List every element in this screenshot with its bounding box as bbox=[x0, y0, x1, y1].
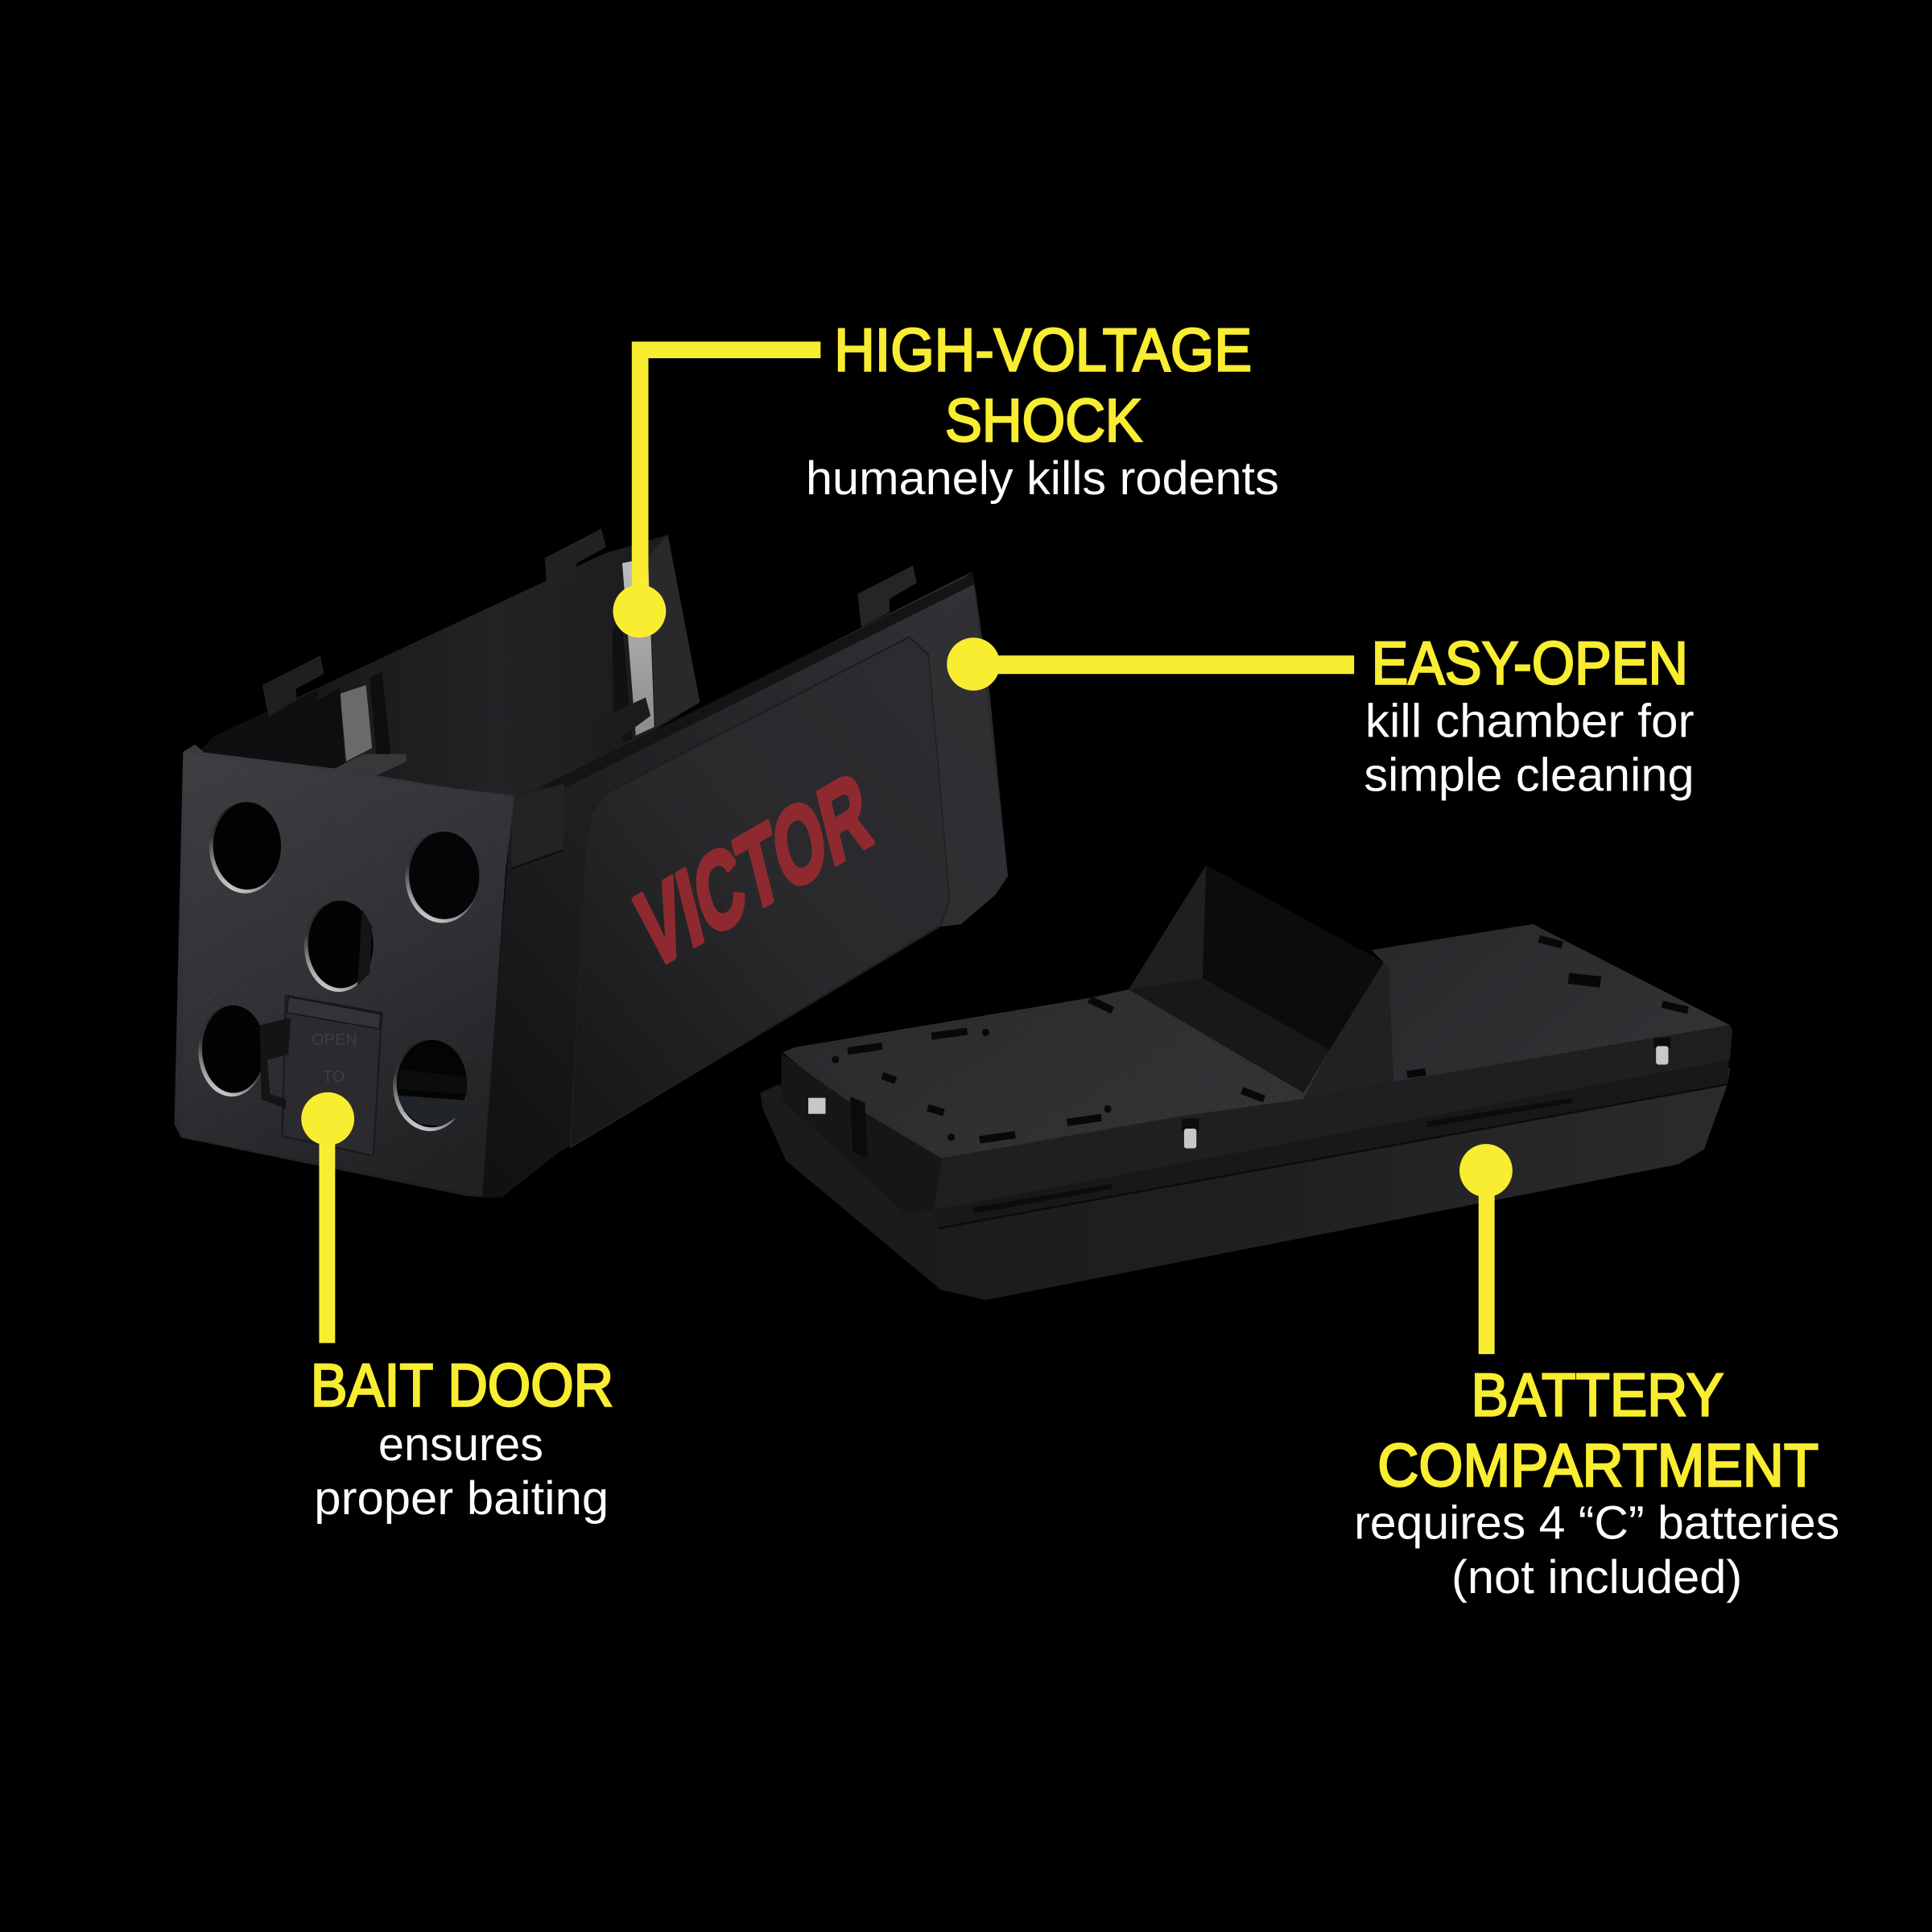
metal pin three bbox=[808, 1098, 826, 1114]
side right strip bbox=[929, 584, 1008, 927]
rim seam bbox=[934, 1047, 1730, 1228]
embossed side panel bbox=[571, 637, 950, 1147]
hopper right wing bbox=[1303, 962, 1393, 1099]
callout: bait door bbox=[301, 1092, 613, 1525]
small top flange bbox=[332, 754, 407, 778]
marker dot bbox=[613, 584, 666, 638]
metal pin two bbox=[1656, 1046, 1668, 1064]
near silver shock plate bbox=[340, 685, 372, 762]
hole lower-left bbox=[198, 1005, 265, 1096]
side upper rim bbox=[542, 572, 975, 796]
product: battery compartment base bbox=[760, 865, 1732, 1300]
leader line bbox=[973, 655, 1354, 674]
description: kill chamber for bbox=[1365, 695, 1695, 747]
interior rear rib bbox=[648, 535, 700, 727]
description: proper baiting bbox=[314, 1472, 609, 1525]
hole center bbox=[304, 901, 374, 992]
heading: BATTERY bbox=[1472, 1361, 1724, 1429]
left interior shadow bbox=[197, 690, 323, 778]
front face texture bbox=[183, 753, 513, 1195]
seam slots bbox=[973, 1098, 1572, 1214]
top surface texture bbox=[795, 989, 1303, 1158]
heading bbox=[1377, 1361, 1818, 1499]
left hinge block bbox=[511, 783, 564, 869]
heading: EASY-OPEN bbox=[1372, 629, 1688, 696]
description bbox=[314, 1418, 609, 1525]
callout: battery compartment bbox=[1354, 1144, 1839, 1604]
right top surface bbox=[1372, 924, 1730, 1082]
hopper back wall bbox=[1203, 865, 1384, 1050]
bait door: TO bbox=[323, 1068, 345, 1086]
heading: COMPARTMENT bbox=[1377, 1431, 1818, 1499]
front face bbox=[176, 747, 513, 1195]
bait door bbox=[260, 996, 382, 1156]
mounting tab four bbox=[857, 566, 917, 627]
bait door: OPEN bbox=[312, 1031, 357, 1049]
rear interior wall bbox=[197, 535, 700, 815]
marker dot bbox=[947, 638, 1000, 691]
leader line bbox=[640, 350, 820, 610]
pin window two bbox=[1653, 1038, 1671, 1049]
mounting tab one bbox=[262, 655, 324, 717]
marker dot bbox=[1459, 1144, 1513, 1197]
leader line bbox=[319, 1119, 335, 1343]
end clip bbox=[850, 1096, 868, 1158]
metal pin one bbox=[1184, 1129, 1196, 1149]
heading: BAIT DOOR bbox=[311, 1351, 613, 1418]
marker dot bbox=[301, 1092, 354, 1146]
heading: SHOCK bbox=[945, 386, 1142, 454]
description: (not included) bbox=[1451, 1551, 1742, 1604]
callout: high-voltage shock bbox=[613, 316, 1279, 638]
side wall bbox=[481, 572, 1008, 1198]
hole top-left bbox=[209, 802, 281, 894]
heading bbox=[834, 316, 1252, 454]
logo: Victor: VICTOR bbox=[627, 748, 880, 993]
interior divider bbox=[369, 671, 390, 762]
description bbox=[1364, 695, 1695, 802]
left end wall bbox=[781, 1054, 941, 1214]
upper front wall bbox=[934, 1025, 1732, 1210]
description: simple cleaning bbox=[1364, 749, 1695, 802]
description: requires 4 “C” batteries bbox=[1354, 1497, 1839, 1550]
description bbox=[1354, 1497, 1839, 1604]
left top surface bbox=[782, 978, 1330, 1158]
left end lower bbox=[760, 1084, 941, 1290]
hole lower-right bbox=[393, 1040, 467, 1131]
product: kill chamber cover bbox=[176, 529, 1008, 1198]
lower body bbox=[760, 1068, 1730, 1300]
description: ensures bbox=[378, 1418, 543, 1471]
mounting tab three bbox=[590, 697, 650, 766]
description: humanely kills rodents bbox=[806, 452, 1279, 505]
icon: far silver shock plate bbox=[622, 558, 654, 736]
hole top-right bbox=[406, 832, 479, 923]
hopper floor bbox=[1129, 978, 1330, 1093]
mounting tab two bbox=[545, 529, 606, 588]
callout: easy-open bbox=[947, 629, 1695, 802]
tray slots bbox=[848, 939, 1688, 1140]
screw holes bbox=[832, 1029, 1112, 1141]
leader line bbox=[1479, 1170, 1495, 1354]
pin window one bbox=[1182, 1119, 1199, 1131]
hopper left wing bbox=[1129, 865, 1206, 989]
heading: HIGH-VOLTAGE bbox=[834, 316, 1252, 384]
